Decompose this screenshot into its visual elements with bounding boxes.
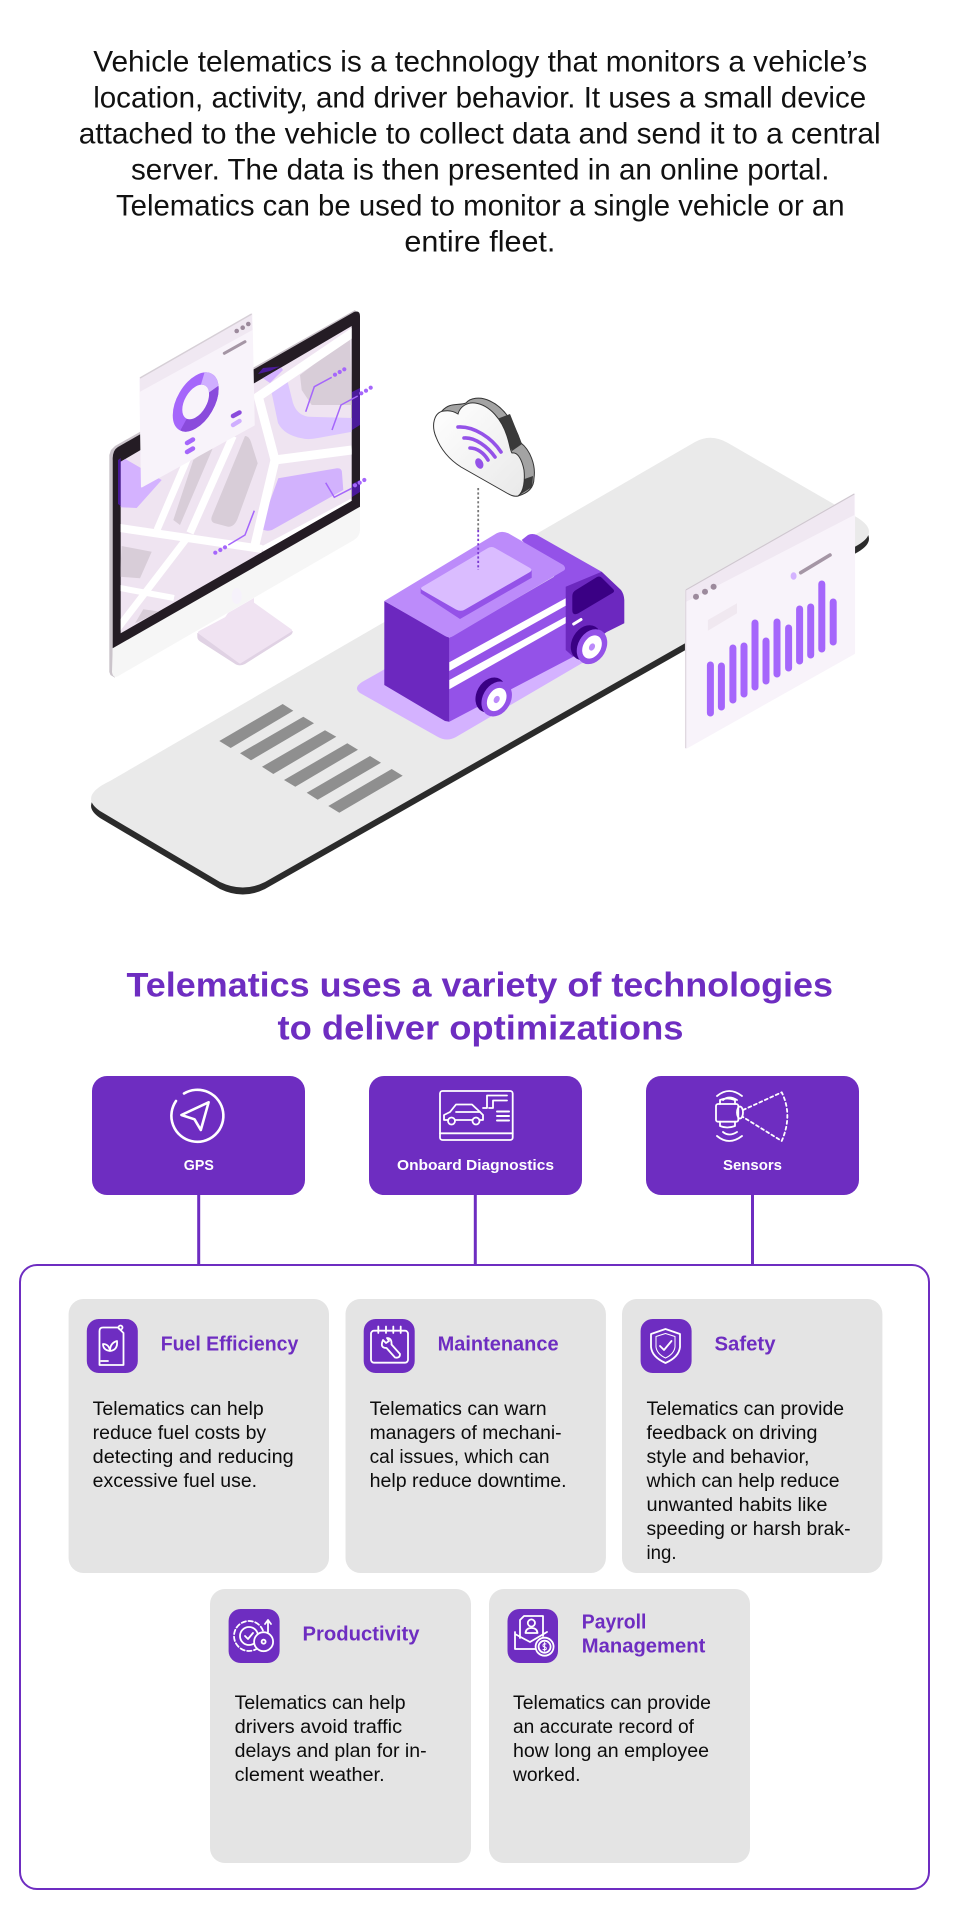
card: Payroll Management: Payroll bbox=[582, 1612, 646, 1634]
card: Safety: unwanted habits like bbox=[646, 1495, 828, 1516]
delivery truck bbox=[384, 532, 624, 722]
dotted link cloud to truck bbox=[477, 488, 479, 570]
heading bbox=[126, 967, 833, 1047]
icon: notepad with wrench bbox=[371, 1326, 408, 1363]
panel: donut chart window bbox=[140, 314, 254, 487]
intro text block: Telematics can be used to monitor a single vehicle or an bbox=[116, 190, 844, 223]
card: Maintenance: managers of mechani- bbox=[370, 1423, 562, 1444]
card: Payroll Management: an accurate record of bbox=[513, 1717, 695, 1738]
intro text block bbox=[79, 46, 881, 259]
card: Payroll Management: how long an employee bbox=[513, 1741, 709, 1762]
panel: Sensors bbox=[646, 1076, 859, 1195]
intro text block: attached to the vehicle to collect data and send it to a central bbox=[79, 118, 881, 151]
bars bbox=[710, 584, 833, 713]
card: Safety: feedback on driving bbox=[646, 1423, 818, 1444]
card: Productivity: delays and plan for in- bbox=[235, 1741, 427, 1762]
outline frame bbox=[20, 1265, 929, 1889]
card: Fuel Efficiency: excessive fuel use. bbox=[93, 1471, 257, 1492]
icon: envelope with coin bbox=[515, 1616, 554, 1656]
card: Payroll Management: Management bbox=[582, 1636, 706, 1658]
card: Productivity: clement weather. bbox=[235, 1765, 385, 1786]
icon: diagnostics screen with car bbox=[440, 1091, 513, 1140]
platform road slab bbox=[91, 438, 869, 894]
icon: fuel can with leaf bbox=[100, 1326, 124, 1365]
intro text block: server. The data is then presented in an online portal. bbox=[131, 154, 830, 187]
intro text block: location, activity, and driver behavior. It uses a small device bbox=[93, 82, 866, 115]
monitor with map bbox=[109, 310, 373, 678]
map screen bbox=[115, 320, 355, 640]
intro text block: Vehicle telematics is a technology that monitors a vehicle’s bbox=[93, 46, 867, 79]
icon: shield with check bbox=[651, 1329, 680, 1363]
heading: to deliver optimizations bbox=[278, 1009, 684, 1047]
card: Fuel Efficiency: detecting and reducing bbox=[93, 1447, 294, 1468]
card: Safety bbox=[622, 1299, 882, 1573]
card: Payroll Management bbox=[489, 1589, 750, 1863]
card: Safety: Telematics can provide bbox=[646, 1399, 844, 1420]
card: Fuel Efficiency bbox=[69, 1299, 329, 1573]
intro text block: entire fleet. bbox=[404, 226, 555, 259]
card: Safety: which can help reduce bbox=[645, 1471, 840, 1492]
illustration: isometric telematics scene bbox=[91, 310, 869, 894]
card: Maintenance: cal issues, which can bbox=[370, 1447, 550, 1468]
panel: Onboard Diagnostics: Onboard Diagnostics bbox=[397, 1157, 554, 1174]
donut chart bbox=[178, 370, 214, 434]
card: Fuel Efficiency: Telematics can help bbox=[93, 1399, 264, 1420]
card: Productivity: Telematics can help bbox=[235, 1693, 406, 1714]
panel: Onboard Diagnostics bbox=[369, 1076, 582, 1195]
card: Maintenance: Maintenance bbox=[438, 1334, 559, 1356]
card: Productivity: drivers avoid traffic bbox=[235, 1717, 402, 1738]
over-bezel purple highlights bbox=[118, 366, 360, 506]
card: Safety: style and behavior, bbox=[646, 1447, 810, 1468]
connector lines bbox=[199, 1190, 752, 1265]
card: Productivity bbox=[210, 1589, 471, 1863]
icon: wifi cloud bbox=[434, 398, 534, 496]
stand bbox=[197, 598, 293, 665]
truck shadow bbox=[357, 604, 584, 740]
panel: GPS: GPS bbox=[184, 1157, 214, 1174]
icon: navigation arrow bbox=[171, 1090, 223, 1142]
crosswalk stripes bbox=[219, 704, 403, 813]
card: Fuel Efficiency: reduce fuel costs by bbox=[93, 1423, 267, 1444]
card: Productivity: Productivity bbox=[302, 1624, 420, 1646]
map pins bbox=[213, 367, 373, 555]
card: Payroll Management: Telematics can provide bbox=[513, 1693, 711, 1714]
card: Fuel Efficiency: Fuel Efficiency bbox=[161, 1334, 299, 1356]
icon: car with sensor cone bbox=[716, 1091, 787, 1141]
card: Maintenance bbox=[346, 1299, 606, 1573]
panel: GPS bbox=[92, 1076, 305, 1195]
card: Payroll Management: worked. bbox=[512, 1765, 580, 1786]
card: Maintenance: Telematics can warn bbox=[370, 1399, 547, 1420]
icon: gear and stopwatch bbox=[234, 1620, 273, 1651]
card: Safety: Safety bbox=[714, 1334, 776, 1356]
card: Maintenance: help reduce downtime. bbox=[370, 1471, 567, 1492]
card: Safety: speeding or harsh brak- bbox=[646, 1519, 850, 1540]
wheels bbox=[469, 620, 613, 722]
panel: bar chart window bbox=[686, 494, 854, 748]
panel: Sensors: Sensors bbox=[723, 1157, 782, 1174]
card: Safety: ing. bbox=[646, 1543, 676, 1564]
heading: Telematics uses a variety of technologies bbox=[126, 967, 833, 1005]
